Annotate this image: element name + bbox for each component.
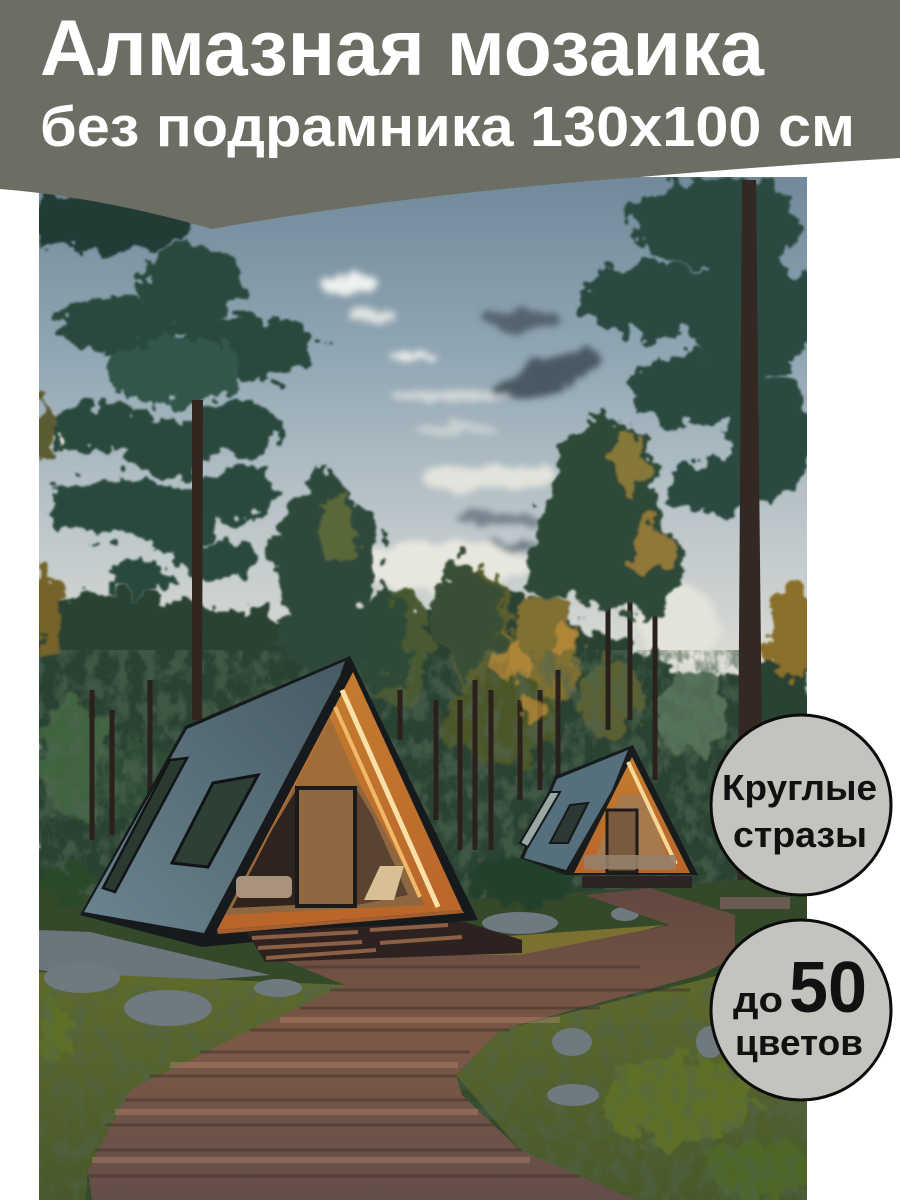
roof plane [84,661,345,933]
boardwalk path [88,888,790,1200]
inner wall [225,785,425,915]
rear cabin [520,745,698,888]
gravel bed [39,930,270,985]
front cabin [80,656,522,962]
deck and steps [217,910,464,934]
header banner [0,0,900,229]
forest band [30,565,814,930]
rear cabin interior [574,757,690,873]
sky [39,177,807,707]
badge: up to 50 colours [711,920,891,1100]
window: long roof [103,758,187,892]
badge: round rhinestones: стразы [733,814,867,855]
ground and grass [39,856,816,1200]
photo: forest cabins [26,176,816,1200]
badge: round rhinestones [711,715,891,895]
rocks [44,907,724,1106]
large right pine [580,176,814,940]
forest trunks [90,602,658,850]
mid pine trees [270,410,690,690]
large left pine [26,190,320,720]
furniture [236,876,292,898]
glass door [297,788,355,906]
title: Алмазная мозаика [40,3,765,92]
subtitle: без подрамника 130х100 см [40,95,855,159]
badge: up to 50 colours: 50 [789,948,867,1028]
gable interior [217,672,462,930]
badge: round rhinestones: Круглые [722,767,877,808]
badge: up to 50 colours: цветов [735,1022,863,1063]
window: roof square [172,775,258,867]
badge: up to 50 colours: до [733,979,783,1020]
rear cabin roof [524,750,628,870]
